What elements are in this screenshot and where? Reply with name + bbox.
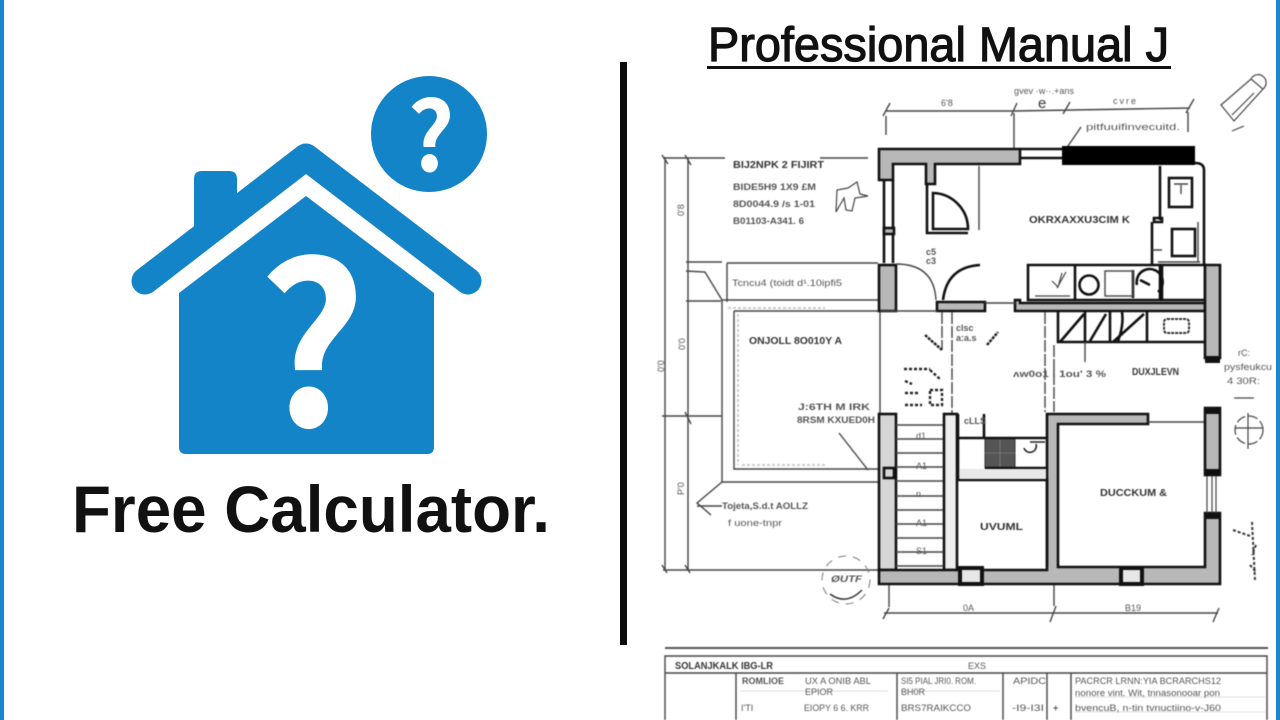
left dimension lines: 0'0 — [656, 360, 666, 372]
bottom dimension line: B19 — [1125, 603, 1141, 613]
east wall upper — [1205, 265, 1220, 358]
left dimension lines: P'0 — [676, 482, 686, 495]
title block table: ROMLIOE — [742, 676, 784, 686]
specification note: B01103-A341. 6 — [733, 216, 804, 226]
north-west walls and door: c3 — [926, 256, 936, 266]
specification note: 8D0044.9 /s 1-01 — [733, 199, 815, 209]
floor plan blueprint — [656, 75, 1272, 720]
title block table: + — [1053, 703, 1058, 713]
title block table: nonore vint. Wit, tnnasonooar pon — [1075, 688, 1220, 698]
left dimension lines: 0'8 — [676, 204, 686, 216]
top dimension line: gvev ·w··.+ans — [1014, 86, 1074, 96]
left dimension lines: 0'0 — [677, 338, 687, 350]
icon: house with question marks — [145, 59, 487, 491]
utility closet and small room — [958, 414, 1047, 567]
top dimension line: cvre — [1113, 96, 1136, 106]
top dimension line: pitfuuifinvecuitd. — [1086, 122, 1180, 132]
middle room notes — [904, 312, 1179, 413]
bottom dimension line — [883, 585, 1219, 622]
utility closet and small room: cLLS — [964, 416, 986, 426]
central horizontal wall — [880, 300, 1205, 311]
open room outline: Tcncu4 (toidt d¹.10ipfi5 — [732, 278, 842, 288]
lower counter cabinets — [1058, 311, 1205, 362]
north-west walls and door — [879, 149, 1020, 311]
staircase: A1 — [916, 518, 927, 528]
specification note: BIJ2NPK 2 FIJIRT — [733, 160, 824, 171]
title block table: UX A ONIB ABL — [805, 676, 871, 686]
title block table: BRS7RAIKCCO — [901, 703, 971, 713]
middle room notes: DUXJLEVN — [1132, 367, 1179, 378]
north-west walls and door: c5 — [926, 247, 936, 257]
house question mark: ? — [258, 170, 366, 491]
title block table: EIOPY 6 6. KRR — [804, 703, 869, 713]
margin sketches: rC: — [1238, 348, 1250, 358]
north wall window and black wall — [979, 146, 1204, 265]
right blue edge — [1276, 0, 1280, 720]
staircase: S1 — [916, 546, 927, 556]
top dimension line: 6'8 — [941, 98, 953, 108]
specification note: BIDE5H9 1X9 £M — [733, 182, 816, 192]
kitchen counter — [1028, 265, 1205, 300]
left heading: Free Calculator.: Free Calculator. — [72, 472, 550, 546]
title block table — [665, 648, 1268, 720]
chimney — [194, 171, 237, 235]
left dimension lines — [656, 155, 878, 573]
title block table: PACRCR LRNN:YIA BCRARCHS12 — [1075, 676, 1221, 686]
title block table: -I9-I3I — [1012, 703, 1044, 713]
left blue edge — [0, 0, 4, 720]
service closet fixtures — [1152, 166, 1200, 265]
staircase: n — [916, 489, 921, 499]
title block table: EPIOR — [805, 687, 834, 697]
open room outline: ONJOLL 8O010Y A — [749, 336, 842, 347]
south wall windows — [960, 568, 1142, 584]
title block table: APIDC — [1013, 676, 1047, 686]
room label bottom right: DUCCKUM & — [1100, 488, 1167, 499]
staircase: A1 — [916, 461, 927, 471]
top dimension line — [883, 86, 1194, 148]
title block table: I'TI — [741, 703, 753, 713]
staircase: d1 — [916, 431, 926, 441]
margin sketches: pysfeukcu — [1224, 362, 1272, 372]
roof — [145, 157, 468, 281]
east wall cap — [1205, 356, 1220, 363]
title block table: SI5 PIAL JRI0. ROM. — [901, 676, 976, 686]
title block table: EXS — [968, 661, 986, 671]
open room outline: f uone-tnpr — [728, 518, 782, 528]
margin sketches: 4 30R: — [1227, 376, 1260, 386]
margin sketches — [1221, 75, 1272, 580]
utility closet and small room: UVUML — [980, 522, 1023, 533]
open room outline: Tojeta,S.d.t AOLLZ — [722, 501, 809, 511]
right heading: Professional Manual J: Professional Manual J — [708, 19, 1169, 72]
middle room notes: ʌw0o1 ! 1ou' 3 % — [1013, 369, 1106, 379]
bottom dimension line: 0A — [963, 603, 974, 613]
specification note — [733, 160, 868, 226]
south wall — [879, 414, 1220, 584]
staircase — [879, 414, 957, 570]
title stamp: ØUTF — [831, 574, 863, 584]
title stamp — [822, 556, 870, 604]
top dimension line: e — [1038, 95, 1046, 112]
east wall lower and window — [1148, 407, 1220, 513]
title block table: BH0R — [901, 687, 926, 697]
open room outline: 8RSM KXUED0H — [797, 415, 875, 425]
middle room notes: clsc — [956, 323, 974, 333]
open room outline — [686, 263, 880, 528]
room label top: OKRXAXXU3CIM K — [1029, 215, 1131, 226]
title block table: bvencuB, n-tin tvnuctiino-v-J60 — [1075, 703, 1221, 713]
vertical divider — [620, 62, 627, 645]
badge circle — [371, 76, 487, 192]
badge question mark: ? — [408, 59, 454, 199]
house body — [179, 196, 434, 454]
title block table: SOLANJKALK IBG-LR — [675, 661, 774, 672]
middle room notes: a:a.s — [956, 333, 977, 343]
open room outline: J:6TH M IRK — [798, 402, 871, 412]
